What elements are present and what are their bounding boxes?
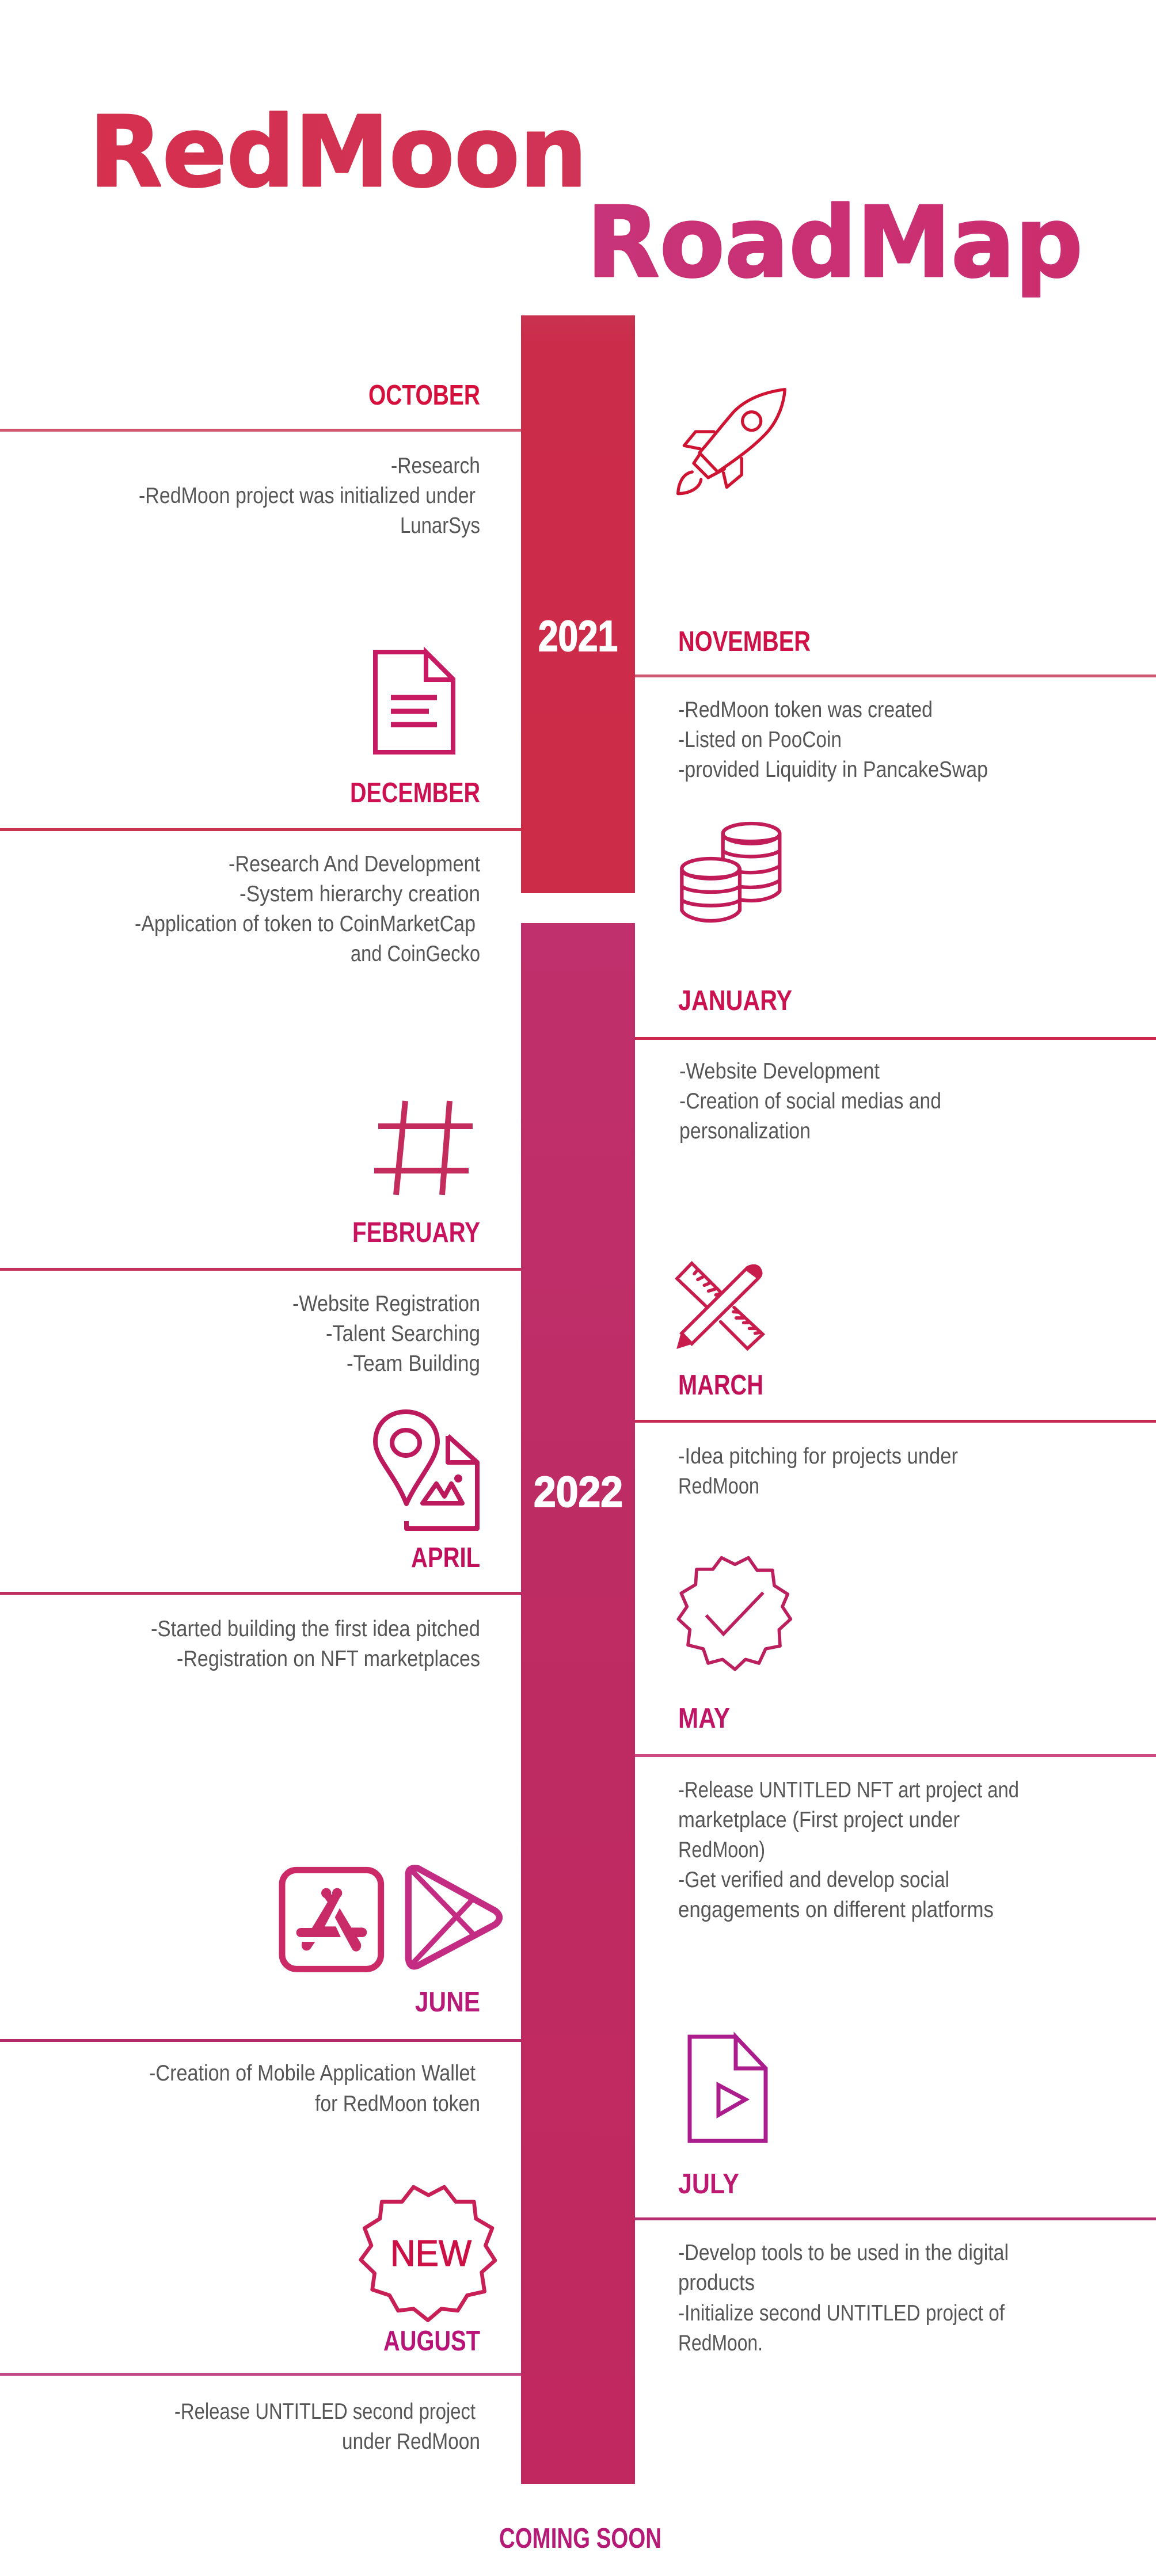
text block: November: -RedMoon token was created: [678, 698, 933, 722]
text block: November: -Listed on PooCoin: [678, 727, 842, 752]
text block: December: -Application of token to CoinMarketCap: [135, 912, 476, 936]
text block: August: under RedMoon: [342, 2429, 480, 2454]
year label: 2022: 2022: [534, 1468, 623, 1516]
month heading: July: JULY: [678, 2169, 739, 2200]
panel: January: [635, 985, 1156, 1144]
text block: April: [151, 1617, 480, 1671]
text block: July: RedMoon.: [678, 2331, 763, 2356]
month heading: March: MARCH: [678, 1370, 763, 1401]
text block: April: -Started building the first idea pitched: [151, 1617, 480, 1641]
timeline bar: 2021: [521, 315, 635, 893]
text block: May: engagements on different platforms: [678, 1897, 994, 1922]
month heading: May: MAY: [678, 1703, 730, 1734]
panel: February: [0, 1217, 521, 1376]
text block: May: [678, 1778, 1019, 1922]
icon: app store: [282, 1870, 381, 1969]
text block: May: -Release UNTITLED NFT art project and: [678, 1778, 1019, 1803]
icon: verified badge: [678, 1558, 790, 1670]
text block: November: [678, 698, 988, 782]
month heading: October: OCTOBER: [368, 380, 480, 411]
year label: 2021: 2021: [538, 612, 618, 660]
text block: May: RedMoon): [678, 1838, 765, 1862]
text block: October: -Research: [391, 454, 480, 478]
text block: April: -Registration on NFT marketplaces: [177, 1647, 480, 1671]
text block: June: [149, 2061, 480, 2116]
month heading: August: AUGUST: [383, 2326, 480, 2357]
text block: August: [174, 2399, 480, 2454]
panel: March: [635, 1370, 1156, 1499]
title: [89, 96, 1083, 300]
panel: April: [0, 1542, 521, 1671]
icon: coins: [682, 824, 779, 921]
text block: January: personalization: [679, 1119, 811, 1144]
title line: RoadMap: RoadMap: [587, 186, 1083, 300]
text block: June: -Creation of Mobile Application Wallet: [149, 2061, 476, 2086]
text block: January: [679, 1059, 941, 1144]
text block: January: -Website Development: [679, 1059, 880, 1084]
text block: February: -Talent Searching: [326, 1321, 480, 1346]
panel: May: [635, 1703, 1156, 1922]
icon: hash: [374, 1101, 473, 1195]
month heading: December: DECEMBER: [350, 778, 480, 809]
text block: December: -System hierarchy creation: [239, 882, 480, 906]
footer: coming soon: COMING SOON: [499, 2523, 661, 2554]
panel: October: [0, 380, 521, 538]
text block: July: -Initialize second UNTITLED project of: [678, 2301, 1005, 2326]
panel: August: [0, 2326, 521, 2454]
text block: May: marketplace (First project under: [678, 1808, 960, 1832]
icon: location and image file: [375, 1412, 477, 1529]
badge text: NEW: NEW: [390, 2232, 472, 2274]
timeline bar: 2022: [521, 923, 635, 2484]
panel: November: [635, 626, 1156, 782]
text block: August: -Release UNTITLED second project: [174, 2399, 476, 2424]
month heading: February: FEBRUARY: [352, 1217, 480, 1248]
month heading: April: APRIL: [411, 1542, 480, 1573]
text block: July: [678, 2240, 1009, 2356]
text block: October: -RedMoon project was initialized under: [139, 483, 476, 508]
icon: play file: [690, 2037, 766, 2141]
text block: March: RedMoon: [678, 1474, 759, 1499]
text block: July: products: [678, 2270, 755, 2295]
text block: October: [139, 454, 480, 538]
icon: play store: [408, 1868, 499, 1967]
text block: May: -Get verified and develop social: [678, 1868, 949, 1892]
text block: November: -provided Liquidity in PancakeSwap: [678, 757, 988, 782]
text block: February: -Team Building: [347, 1351, 480, 1376]
month heading: June: JUNE: [415, 1987, 480, 2018]
icon: document: [375, 652, 453, 752]
text block: December: -Research And Development: [229, 852, 480, 877]
text block: February: -Website Registration: [292, 1291, 480, 1316]
icon: rocket: [678, 390, 785, 494]
panel: July: [635, 2169, 1156, 2356]
text block: December: [135, 852, 480, 966]
text block: January: -Creation of social medias and: [679, 1089, 941, 1114]
text block: March: [678, 1444, 958, 1499]
panel: December: [0, 778, 521, 966]
text block: March: -Idea pitching for projects under: [678, 1444, 958, 1469]
month heading: January: JANUARY: [678, 985, 792, 1016]
text block: June: for RedMoon token: [315, 2091, 480, 2116]
text block: October: LunarSys: [400, 513, 480, 538]
text block: February: [292, 1291, 480, 1376]
panel: June: [0, 1987, 521, 2116]
month heading: November: NOVEMBER: [678, 626, 811, 657]
text block: December: and CoinGecko: [351, 942, 480, 966]
icon: new badge: [361, 2187, 495, 2320]
text block: July: -Develop tools to be used in the digital: [678, 2240, 1009, 2265]
icon: ruler and pencil: [677, 1263, 763, 1348]
title line: RedMoon: RedMoon: [89, 96, 587, 209]
